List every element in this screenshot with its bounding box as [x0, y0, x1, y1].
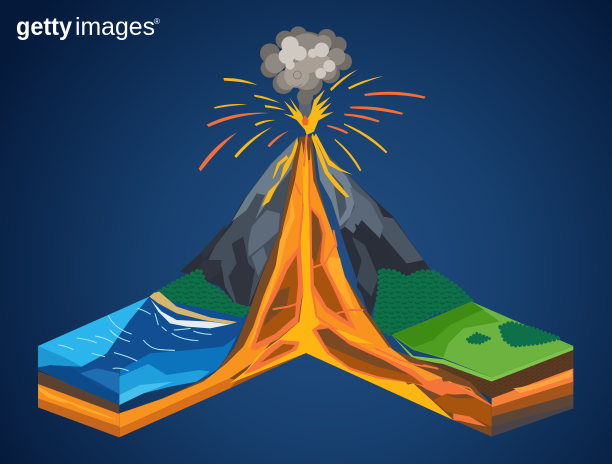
rock strata	[38, 397, 119, 437]
waves	[58, 308, 212, 371]
lower right lava veins	[312, 324, 492, 437]
lowest strata of the section	[433, 393, 492, 427]
beach	[149, 292, 237, 324]
logo: gettyimages: images	[75, 13, 155, 41]
lava fountain	[283, 89, 334, 135]
smoke column	[298, 93, 312, 120]
lower left chamber	[243, 340, 300, 375]
large lower chamber	[312, 324, 443, 393]
soil	[392, 335, 573, 398]
ash cloud	[260, 26, 352, 120]
sea surface and water side	[38, 297, 247, 405]
section base	[119, 137, 492, 437]
right block: grass and strata	[392, 302, 573, 437]
forest right	[374, 270, 472, 335]
orange stream	[367, 347, 492, 405]
lower strata	[492, 368, 573, 407]
logo: gettyimages: ®	[154, 17, 160, 26]
logo: gettyimages	[16, 13, 160, 41]
forest left	[159, 270, 248, 322]
right orange band	[308, 147, 393, 357]
left chamber	[251, 245, 302, 350]
lava cross-section	[119, 135, 492, 437]
tree clumps	[500, 322, 560, 346]
left block: ocean and strata	[38, 292, 247, 437]
central conduit	[230, 135, 453, 420]
grass surface	[392, 302, 573, 377]
bottom strips	[119, 378, 240, 437]
logo: gettyimages: getty	[16, 13, 72, 41]
yellow streak	[320, 325, 374, 344]
lava flows on the slope	[262, 133, 353, 207]
right chamber	[309, 205, 356, 330]
left orange band	[119, 140, 305, 428]
mountain	[180, 133, 431, 318]
sparks	[199, 69, 426, 171]
grass edge	[392, 335, 573, 382]
